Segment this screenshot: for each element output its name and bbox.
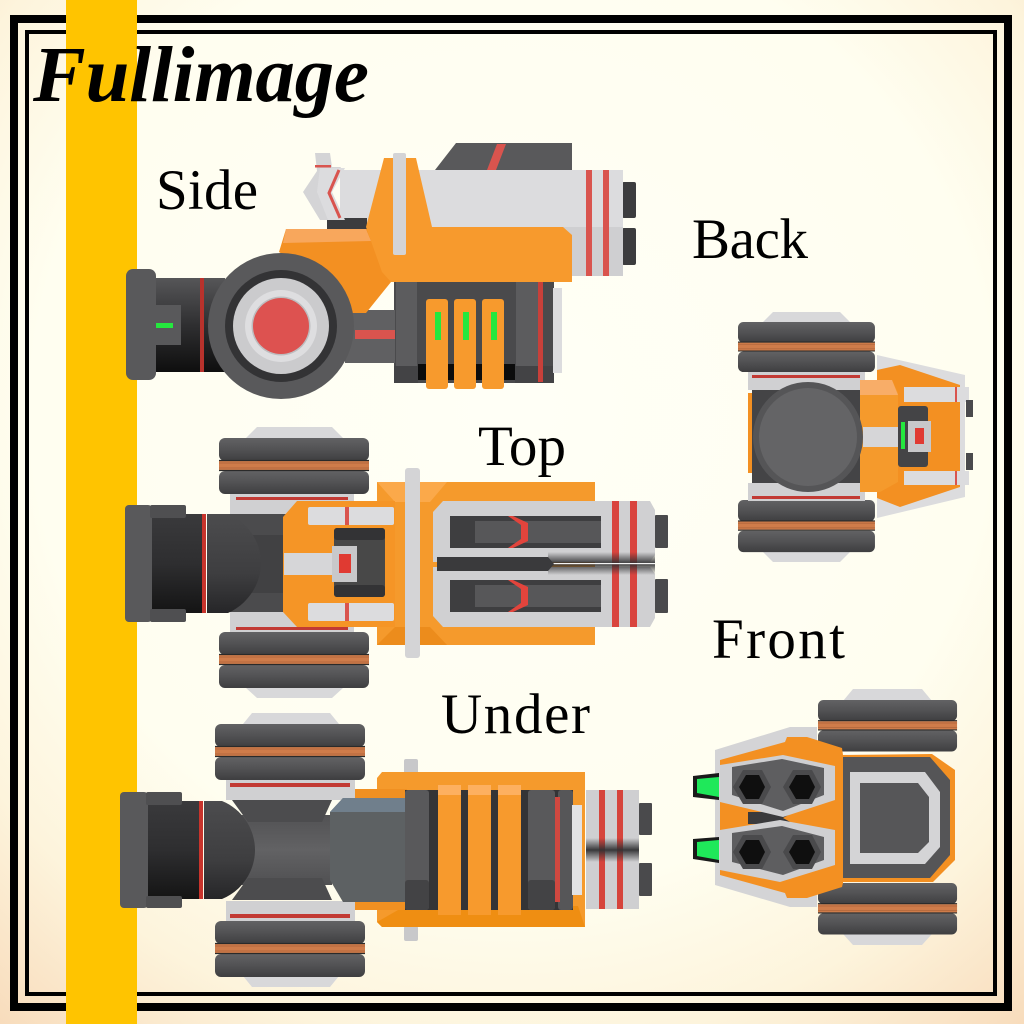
front orange section (283, 501, 395, 627)
dark block (843, 757, 950, 878)
top dark housing (435, 143, 572, 170)
barrel (146, 801, 201, 899)
muzzle cap (126, 269, 156, 380)
cross member (240, 815, 332, 885)
grey barrel (340, 170, 623, 276)
main orange plate (377, 482, 595, 645)
arms (904, 387, 969, 402)
dark tips (622, 182, 636, 218)
lower dark box (394, 282, 554, 383)
lower wheel (738, 500, 875, 562)
back view of device (738, 312, 973, 562)
grey square with red insert (332, 546, 357, 582)
pivot disc (208, 253, 354, 399)
white square ring (850, 772, 940, 864)
neck (345, 310, 395, 363)
axle collars (230, 494, 354, 514)
tips (966, 400, 973, 417)
pivot disc (753, 382, 863, 492)
gun barrels (433, 501, 655, 562)
lower wheel (219, 632, 369, 698)
vertical grey strip (405, 468, 420, 658)
orange right panel (840, 754, 955, 882)
barrel (150, 514, 205, 613)
muzzle cap (120, 792, 182, 908)
label: Back: Back (692, 208, 808, 271)
orange bars (438, 785, 461, 915)
orange shell (377, 772, 585, 927)
upper wheel (219, 427, 369, 494)
lower wheel (818, 883, 957, 945)
dark collar under nose (327, 218, 367, 229)
lower muzzle housing (720, 820, 835, 882)
upper wheel (738, 312, 875, 372)
top view of device (125, 427, 668, 698)
side tabs (404, 759, 418, 775)
center dark gap (437, 557, 554, 571)
barrel rings (612, 501, 637, 627)
grey arms (308, 507, 394, 525)
orange body (877, 365, 960, 507)
label: Top: Top (478, 415, 566, 478)
label: Front: Front (712, 608, 845, 671)
axle collars (226, 780, 355, 800)
inner dark box (405, 790, 573, 910)
orange bars with green lights (426, 299, 448, 389)
orange main body (366, 158, 572, 282)
grey back plate (715, 727, 817, 907)
axle collars (748, 372, 865, 390)
dark center block (334, 528, 385, 597)
muzzle cap (125, 505, 186, 622)
upper wheel (818, 689, 957, 752)
dark slot (748, 812, 794, 824)
gap shading (548, 552, 655, 575)
rear grey section (586, 790, 639, 909)
barrel rings (586, 170, 592, 276)
vertical grey strip (393, 153, 406, 255)
grey square with red insert (908, 421, 931, 452)
lower wheel (215, 921, 365, 987)
grey block (330, 798, 405, 902)
cross member (226, 514, 296, 612)
tips (655, 515, 668, 548)
orange wedge (279, 229, 391, 313)
yellow vertical band (66, 0, 137, 1024)
green lights (693, 773, 719, 800)
label: Side: Side (156, 159, 258, 222)
under view of device (120, 713, 652, 987)
dark axle (752, 390, 863, 483)
label: Under: Under (441, 683, 590, 746)
black barrel (150, 278, 225, 372)
orange box (860, 380, 898, 492)
upper muzzle housing (720, 755, 835, 817)
chevron nose (303, 153, 341, 220)
side view of device (126, 143, 636, 399)
orange left housing (720, 737, 843, 898)
title: Fullimage (32, 32, 369, 119)
grey back plate (877, 355, 965, 518)
front view of device (693, 689, 957, 945)
upper wheel (215, 713, 365, 780)
dark center (898, 406, 928, 467)
